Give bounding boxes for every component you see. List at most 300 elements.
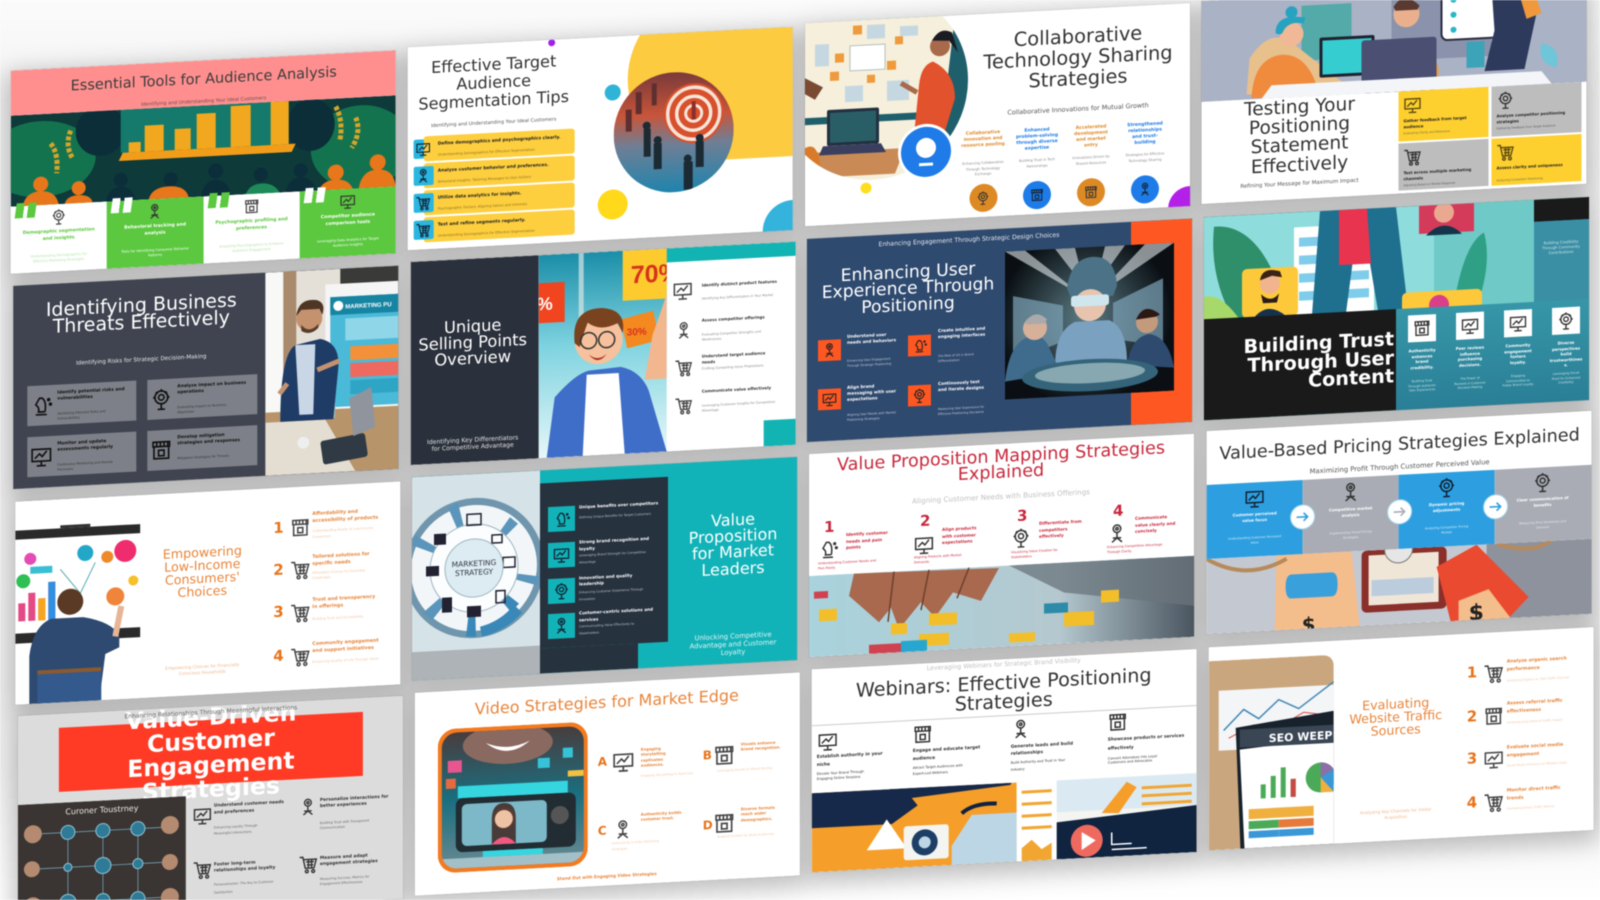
panel: Collaborative Technology Sharing Strategies <box>805 3 1190 226</box>
item 4 <box>907 379 984 416</box>
column 2: expertise <box>1025 145 1049 151</box>
item 1: needs and behaviors <box>847 337 896 345</box>
column 4: trustworthines <box>1550 356 1582 363</box>
row 1: Understanding Demographics for Effective Segmentation <box>438 148 535 157</box>
item 1: accessibility of products <box>312 516 378 524</box>
pricing band column 2: Implementing Tiered Pricing <box>1329 529 1372 536</box>
item 3: Enhancing Customer Experience Through <box>579 587 643 594</box>
column 2: Partnerships <box>1026 163 1048 168</box>
item 1 <box>193 797 298 839</box>
item 4: Monitor direct traffic <box>1507 786 1561 794</box>
panel: Webinars: Effective Positioning Strategies <box>812 649 1197 872</box>
item 2: engaging interfaces <box>938 331 985 339</box>
card: psychographic profiling: preferences <box>236 225 267 231</box>
subtitle: Identifying Risks for Strategic Decision-Making <box>76 354 206 367</box>
title: Essential Tools for Audience Analysis <box>71 65 337 95</box>
row 2: Weaknesses <box>702 337 721 342</box>
item A: A <box>598 755 607 769</box>
item 1 <box>273 508 379 539</box>
column 2 <box>1454 310 1486 390</box>
item 4: Evaluating Direct Traffic Metrics <box>1507 804 1554 811</box>
item 2: Differentiation <box>938 358 960 363</box>
column 3: Industry <box>1011 767 1025 771</box>
subtitle: Identifying and Understanding Your Ideal Customers <box>141 96 266 108</box>
side teal note: Building Credibility <box>1544 240 1578 245</box>
subtitle <box>1360 807 1432 821</box>
title <box>982 22 1173 93</box>
card 2 <box>147 374 257 420</box>
item 3: Satisfaction <box>214 889 233 894</box>
column 4 <box>1108 707 1197 774</box>
panel: Value Proposition for Market Leaders <box>412 457 797 680</box>
title: Selling Points <box>418 330 527 355</box>
card 4: strategies and responses <box>177 438 240 446</box>
title: Leaders <box>701 557 765 580</box>
row 2: Evaluating Competitor Strengths and <box>702 330 761 337</box>
column 4: Showcase products or services <box>1108 734 1184 743</box>
item 4: Community engagement <box>312 639 379 647</box>
column 2: The Power of <box>1460 376 1480 381</box>
panel: Empowering Low-Income Consumers' Choices <box>15 481 400 705</box>
item 4 <box>273 637 398 673</box>
item C: Strategies <box>612 846 627 851</box>
item 2 <box>548 537 666 569</box>
item A: audiences. <box>641 762 664 768</box>
item 3: Personalization: The Key to Customer <box>214 880 274 887</box>
column 2: influence <box>1460 350 1480 356</box>
column 1 <box>817 726 909 793</box>
item 3: leadership <box>579 580 604 586</box>
title: Proposition <box>689 524 777 548</box>
subtitle: Aligning Customer Needs with Business Offerings <box>912 487 1090 506</box>
column 3: loyalty. <box>1510 359 1526 365</box>
item 4 <box>548 608 666 640</box>
arrow circles <box>1207 411 1592 634</box>
item 1: Defining Unique Benefits for Target Customers <box>579 512 651 519</box>
item 3: Evaluate social media <box>1507 743 1563 751</box>
step 2: Demands <box>914 560 929 564</box>
card 2 <box>1492 82 1582 137</box>
card 3: channels <box>1404 175 1423 181</box>
item 3: Trust and transparency <box>312 595 375 603</box>
row 3: Understand target audience <box>702 350 765 359</box>
title: Value-Based Pricing Strategies Explained <box>1219 425 1580 464</box>
panel: Effective Target Audience Segmentation Tips <box>408 27 793 250</box>
item D: Diverse formats <box>741 805 775 812</box>
item B: Leveraging Visuals for Brand Identity <box>717 766 772 773</box>
title <box>856 665 1152 719</box>
item 2: Leveraging Brand Strength for Competitive <box>579 550 646 557</box>
item C: Authenticity in Video Marketing <box>612 839 659 845</box>
pricing band column 3: Analyzing Competitor Pricing <box>1425 524 1468 530</box>
item B: brand recognition. <box>741 745 781 752</box>
dark content panel <box>540 477 668 649</box>
column 3 <box>1072 123 1110 199</box>
card: psychographic profiling: Psychographic profiling and <box>215 217 288 226</box>
card: behavioral tracking: Patterns <box>148 253 162 257</box>
item D: demographics. <box>741 816 772 822</box>
subtitle: Identifying Key Differentiators <box>427 434 518 446</box>
step 4: Enhancing Competitive Advantage <box>1107 542 1162 549</box>
card 4: Develop mitigation <box>177 433 225 440</box>
card 3: Monitor and update <box>57 439 106 447</box>
row 3: Psychographic Factors: Aligning Values and Interests <box>438 202 527 211</box>
panel: Value-Driven Customer Engagement Strategies <box>18 696 403 900</box>
row 3 <box>674 350 766 378</box>
item 1: Through Strategic Positioning <box>847 362 891 368</box>
column 1: Engaging Online Sessions <box>817 775 860 781</box>
item 3: Foster long-term <box>214 860 256 868</box>
panel: Value-Based Pricing Strategies Explained <box>1207 411 1592 634</box>
item D: D <box>703 818 713 833</box>
step 1: 1 <box>824 518 834 536</box>
column 4: Strengthened <box>1127 121 1163 128</box>
column 1: Through Authentic <box>1408 383 1436 388</box>
card: competitor audience <box>300 186 396 258</box>
side teal note <box>1534 219 1589 303</box>
subtitle: Refining Your Message for Maximum Impact <box>1240 178 1359 190</box>
item 1: Analyze organic search <box>1507 656 1567 665</box>
column 3: Build Authority and Trust in Your <box>1011 758 1065 765</box>
title: Positioning <box>861 293 955 318</box>
item A: storytelling <box>641 751 666 757</box>
column 4: and trust- <box>1132 134 1158 140</box>
panel: Value Proposition Mapping Strategies Explained <box>809 434 1194 657</box>
column 1: Through Technology <box>966 166 1000 171</box>
step 1: Identify customer <box>846 530 888 537</box>
card 2: Analyze competitor positioning <box>1496 110 1565 118</box>
title: Technology Sharing <box>983 41 1173 74</box>
item 1: Understand customer needs <box>214 800 284 809</box>
item C <box>598 809 694 854</box>
image: woman with headset and control table <box>1004 242 1175 400</box>
item D <box>703 803 799 845</box>
subtitle: Empowering Choices for Financially <box>165 662 239 671</box>
item 2: Create intuitive and <box>938 326 985 333</box>
subtitle <box>690 630 776 659</box>
title: Building Trust <box>1243 327 1394 358</box>
step 3: Differentiate from <box>1039 519 1082 526</box>
card: demographic segmentation <box>11 202 107 274</box>
pricing band column 3 <box>1399 470 1495 549</box>
card 1: vulnerabilities <box>57 395 93 402</box>
item 2: 2 <box>1467 707 1477 726</box>
pricing band column 2: Strategies <box>1343 535 1358 540</box>
subtitle: Leveraging Webinars for Strategic Brand Visibility <box>927 657 1081 672</box>
step 4 <box>1107 499 1194 555</box>
column 4: Convert Attendees into Loyal <box>1108 754 1157 761</box>
item 1: Analyzing Organic vs. Paid Traffic Sources <box>1507 675 1569 683</box>
column 3: fosters <box>1510 354 1526 359</box>
image: marketing strategy wheel: MARKETING <box>452 558 497 569</box>
step 2: with customer <box>942 532 976 539</box>
card: demographic segmentation: Demographic segmentation <box>23 227 95 236</box>
item 4: Measuring Success: Metrics for <box>320 874 369 881</box>
image: man drawing on whiteboard <box>14 523 141 705</box>
item 3 <box>817 383 897 422</box>
column 3: Community <box>1506 342 1530 348</box>
step 1: Understanding Customer Needs and <box>818 558 876 566</box>
title: Statement <box>1251 133 1348 159</box>
image: presenter with marketing poster: MARKETING PU <box>345 302 392 311</box>
item 4: Communicating Value Effectively to <box>579 622 634 628</box>
image: excited man with discount cards: 30% <box>626 327 646 339</box>
title <box>837 440 1165 490</box>
image: woman on retro video camera screen <box>437 722 588 874</box>
title: Strategies <box>142 771 280 806</box>
item 2: Assess referral traffic <box>1507 699 1563 707</box>
title: Testing Your <box>1244 94 1355 121</box>
pricing band column 1: Customer perceived <box>1233 510 1277 518</box>
step 3: Visualizing Value Creation for <box>1011 548 1058 554</box>
item 1: Consumers <box>312 534 331 539</box>
row 1: Identify distinct product features <box>702 279 777 288</box>
item 3 <box>273 593 398 629</box>
column 2: purchasing <box>1458 356 1482 362</box>
column 3: Generate leads and build <box>1011 742 1073 750</box>
step 1: points <box>846 544 861 550</box>
item 3 <box>1467 740 1592 777</box>
column 2: problem-solving <box>1016 133 1058 140</box>
step 1 <box>818 515 910 572</box>
title: Sources <box>1371 721 1421 739</box>
column 4: build <box>1560 351 1572 357</box>
row 4 <box>412 208 576 243</box>
item 1 <box>1467 653 1592 690</box>
card 2: Gathering Feedback from Target Audience <box>1496 123 1555 130</box>
item 2 <box>273 550 370 580</box>
item 1: Unique benefits over competitors <box>579 500 658 509</box>
column 1: Collaborative <box>966 130 1000 137</box>
row 4: Advantage <box>702 408 719 413</box>
column 2 <box>1016 126 1058 202</box>
subtitle: Maximizing Profit Through Customer Perceived Value <box>1310 458 1490 476</box>
title: Positioning <box>1249 113 1350 140</box>
title: Collaborative <box>1014 22 1142 51</box>
column 2: Attract Target Audiences with <box>913 763 963 770</box>
item 3: 3 <box>1467 749 1477 768</box>
card 4: Mitigation Strategies for Threats <box>177 454 229 460</box>
item 2: Tailored solutions for <box>312 552 370 560</box>
item 4: Engagement Effectiveness <box>320 880 362 886</box>
image: excited man with discount cards <box>538 248 668 458</box>
pricing band column 1: value focus <box>1242 516 1267 523</box>
title: Engagement <box>127 746 295 783</box>
item 2 <box>907 326 986 363</box>
step 4: Communicate <box>1135 514 1167 521</box>
footer line: Stand Out with Engaging Video Strategies <box>557 871 657 881</box>
column 1: User Experiences <box>1409 387 1435 393</box>
row 4: Communicate value effectively <box>702 385 771 394</box>
column 4 <box>1549 306 1583 385</box>
column 1: Building Trust <box>1412 378 1432 383</box>
orange strip <box>1131 219 1192 425</box>
column 4: Diverse <box>1558 340 1574 346</box>
item 2: effectiveness <box>1507 708 1541 715</box>
item C: customer trust. <box>641 815 674 822</box>
image: hands placing sticky notes on a map <box>809 556 1194 657</box>
column 2: Peer reviews <box>1456 345 1484 351</box>
step 4: 4 <box>1113 501 1123 520</box>
subtitle: Conscious Households <box>179 668 226 676</box>
item 4 <box>299 850 403 895</box>
step 3: effectively <box>1039 533 1064 539</box>
item B: B <box>703 748 712 763</box>
item 1: Affordability and <box>312 510 358 517</box>
black corner block <box>1534 197 1589 222</box>
red band <box>59 712 363 792</box>
row 1 <box>672 279 778 301</box>
pricing band column 4: Measuring Price Sensitivity and <box>1519 519 1566 526</box>
teal panel <box>1396 299 1589 410</box>
image: marketing strategy wheel <box>412 471 540 680</box>
column 3: and market <box>1076 136 1106 143</box>
title: Enhancing User <box>841 259 975 286</box>
item 2: specific needs <box>312 560 351 567</box>
column 1 <box>960 129 1006 206</box>
quote mark <box>207 192 230 208</box>
card 1 <box>27 381 136 426</box>
card: demographic segmentation: Effective Marketing Strategies <box>33 257 84 264</box>
card: behavioral tracking: Tools for Identifying Consumer Behavior <box>121 246 189 254</box>
side teal note: Through Community <box>1542 244 1580 250</box>
quote mark <box>15 202 37 218</box>
image: stylised webinar illustration <box>812 773 1197 872</box>
item 3: expectations <box>847 395 877 401</box>
column 3: Accelerated <box>1076 124 1106 131</box>
card 2: strategies <box>1496 118 1519 124</box>
card: psychographic profiling <box>203 191 300 264</box>
title <box>163 543 242 600</box>
item 2: Strong brand recognition and <box>579 536 649 544</box>
title: Experience Through <box>822 274 994 303</box>
title: Through User <box>1247 346 1394 377</box>
item 3 <box>548 573 666 605</box>
column 1: enhances <box>1412 353 1432 359</box>
subtitle: Collaborative Innovations for Mutual Growth <box>1007 101 1149 117</box>
column 3: Communities to <box>1506 378 1530 383</box>
column 1: Authenticity <box>1408 347 1436 354</box>
card 4 <box>1492 134 1582 186</box>
item 2: The Role of UX in Brand <box>938 352 974 358</box>
item 4: services <box>579 616 598 622</box>
item 2: loyalty <box>579 546 595 551</box>
row 1: Identifying Key Differentiators in Your Market <box>702 293 773 301</box>
pricing band column 2 <box>1303 475 1399 554</box>
item 4: Measuring User Experience for <box>938 405 984 411</box>
card 1: audience <box>1404 123 1423 129</box>
item C: C <box>598 824 607 838</box>
image: team with laptops <box>1201 0 1587 102</box>
item 1: Understand user <box>847 332 886 339</box>
title: Overview <box>434 347 511 370</box>
image: presenter with marketing poster <box>264 266 399 476</box>
step 2 <box>914 509 1006 565</box>
card: demographic segmentation: and insights <box>43 235 75 242</box>
card 1: Gather feedback from target <box>1404 115 1467 123</box>
quote mark <box>111 197 133 213</box>
column 4: Credibility <box>1558 380 1574 385</box>
column 4: Technology Sharing <box>1128 157 1162 163</box>
subtitle: Analyzing Key Channels for Visitor <box>1360 807 1432 815</box>
item 1: performance <box>1507 666 1540 673</box>
item 4: Enhancing Quality of Life Through Value <box>312 657 378 664</box>
image: price tags and scale: $ <box>1469 600 1484 626</box>
column 2: through diverse <box>1016 139 1058 146</box>
column 1: innovation and <box>964 136 1002 143</box>
column 1: Elevate Your Brand Through <box>817 770 864 776</box>
subtitle: Identifying and Understanding Your Ideal Customers <box>431 117 556 129</box>
item 1: Understanding Needs of Low-Income <box>312 526 373 533</box>
title: Consumers' <box>165 569 240 588</box>
panel: Evaluating Website Traffic Sources <box>1209 627 1594 850</box>
card 1: Evaluating Clarity and Relevance <box>1404 129 1450 135</box>
column 2: Engage and educate target <box>913 745 980 754</box>
item 4 <box>1467 783 1592 820</box>
image: price tags and scale <box>1207 539 1592 634</box>
column 3 <box>1502 308 1534 388</box>
subtitle: Advantage and Customer <box>690 638 776 651</box>
card: psychographic profiling: Audience Engagement <box>232 247 271 253</box>
title: for Market <box>692 541 774 564</box>
item 1: and preferences <box>214 809 254 816</box>
column 3: Engaging <box>1511 373 1525 378</box>
card 1: Identifying Potential Risks and <box>57 409 106 416</box>
card 4 <box>147 425 257 471</box>
item A: captivates <box>641 756 663 763</box>
item 1: 1 <box>273 519 284 537</box>
title: Empowering <box>163 543 242 562</box>
title <box>822 259 994 318</box>
column 2: Expert-Led Webinars <box>913 770 948 776</box>
item 3: engagement <box>1507 752 1539 759</box>
pricing band column 3: Dynamic pricing <box>1429 500 1464 507</box>
column 1: resource pooling <box>961 142 1005 149</box>
item 2: Challenges <box>312 575 331 580</box>
pricing band column 2: Competitive market <box>1329 505 1372 513</box>
column 3 <box>1011 714 1103 781</box>
step 1: needs and pain <box>846 537 882 544</box>
subtitle: for Competitive Advantage <box>432 442 514 453</box>
item 4: 4 <box>273 647 284 665</box>
item 4: Measure and adapt <box>320 854 368 861</box>
column 3: Shared Resources <box>1076 160 1106 166</box>
subtitle: Loyalty <box>721 648 745 657</box>
card: competitor audience: Audience Insights <box>333 242 363 248</box>
column 2: audience <box>913 756 935 762</box>
item A: Engaging <box>641 746 661 752</box>
title: Value Proposition Mapping Strategies <box>837 438 1165 476</box>
item 3: Aligning User Needs with Market <box>847 410 896 417</box>
row 2: Behavioral Insights: Tailoring Messages to User Actions <box>438 175 531 184</box>
pricing band column 4: Clear communication of <box>1517 495 1569 503</box>
column 1: Enhancing Collaboration <box>962 160 1004 166</box>
item 3: Align brand <box>847 383 874 390</box>
panel: Building Trust Through User Content <box>1204 197 1589 420</box>
item 2: better experiences <box>320 802 367 809</box>
column 4: Customers and Advocates <box>1108 759 1152 765</box>
column 1: credibility. <box>1410 364 1434 370</box>
step 3: 3 <box>1017 506 1027 525</box>
card: behavioral tracking: analysis <box>145 230 166 236</box>
subtitle: Acquisition <box>1384 813 1407 820</box>
title: Identifying Business <box>46 289 237 321</box>
step 4: concisely <box>1135 528 1157 534</box>
item 3: Social Media Influence on Website Visits <box>1507 760 1567 768</box>
item 2 <box>1467 696 1592 733</box>
title <box>1243 94 1356 178</box>
card 2: operations <box>177 389 204 395</box>
